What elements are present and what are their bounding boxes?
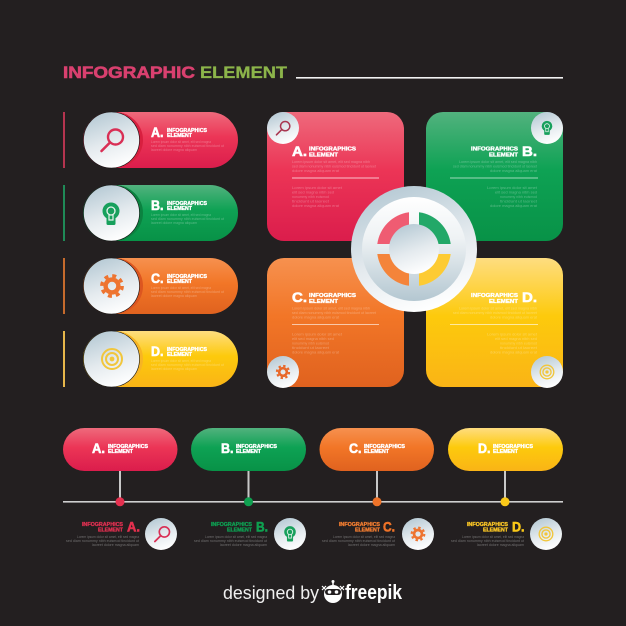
caption D: INFOGRAPHICS [467, 522, 508, 528]
caption D: D. [512, 518, 524, 534]
caption A: Lorem ipsum dolor sit amet, elit sed magna [77, 535, 139, 539]
pill C text: Lorem ipsum dolor sit amet, elit sed magna [151, 286, 211, 290]
panel C text [292, 289, 379, 354]
pill B text [151, 197, 224, 225]
segment: orange [377, 254, 409, 286]
panel A text: nonummy nibh euismod [292, 195, 329, 199]
segment: yellow [419, 254, 451, 286]
segment: red [377, 212, 409, 244]
icon: gear [102, 276, 122, 296]
pill C text [151, 270, 224, 298]
title: INFOGRAPHIC [63, 64, 195, 82]
panel A text: dolore magna aliquam erat [292, 169, 339, 173]
panel B text: Lorem ipsum dolor sit amet, elit sed magna nibh [459, 160, 537, 164]
pill C text: sed diam nonummy nibh euismod tincidunt ut [151, 290, 224, 294]
timeline pill D: INFOGRAPHICS [493, 444, 533, 450]
timeline pill C [320, 428, 434, 471]
caption A: A. [127, 518, 140, 534]
timeline pill D [448, 428, 563, 471]
panel C text: ELEMENT [309, 299, 339, 305]
icon: freepik mascot [322, 580, 344, 603]
timeline pill B: ELEMENT [236, 449, 262, 455]
timeline pill D: ELEMENT [493, 449, 519, 455]
pill B text: sed diam nonummy nibh euismod tincidunt ut [151, 217, 224, 221]
pill B [83, 185, 238, 241]
side bar: green [63, 185, 65, 241]
panel B text: INFOGRAPHICS [471, 146, 518, 152]
caption C: laoreet dolore magna aliquam [348, 543, 395, 547]
panel B text: B. [522, 143, 537, 159]
pill C text: INFOGRAPHICS [167, 274, 207, 280]
timeline pill B [191, 428, 306, 471]
pill C text: laoreet dolore magna aliquam [151, 294, 197, 298]
footer credit: designed by [223, 582, 320, 603]
pill A text: ELEMENT [167, 133, 193, 139]
pill B text: Lorem ipsum dolor sit amet, elit sed magna [151, 213, 211, 217]
pill D text: laoreet dolore magna aliquam [151, 367, 197, 371]
timeline pill A: INFOGRAPHICS [108, 444, 148, 450]
pill C text: ELEMENT [167, 279, 193, 285]
timeline pill C: C. [349, 440, 362, 456]
timeline pill A: ELEMENT [108, 449, 134, 455]
panel B text: tincidunt ut laoreet [500, 200, 537, 204]
panel B text: dolore magna aliquam erat [490, 204, 537, 208]
panel A text: ELEMENT [309, 152, 339, 158]
caption C: sed diam nonummy nibh euismod tincidunt ut [322, 539, 395, 543]
panel D text: ELEMENT [489, 299, 519, 305]
pill C [83, 258, 238, 314]
pill A text: A. [151, 124, 164, 140]
panel A text: elit sed magna nibh sed [292, 190, 334, 194]
panel D text: dolore magna aliquam erat [490, 316, 537, 320]
panel C text: elit sed magna nibh sed [292, 337, 334, 341]
side bar: yellow [63, 331, 65, 387]
caption A: sed diam nonummy nibh euismod tincidunt ut [66, 539, 139, 543]
centre ring chart [351, 186, 477, 312]
timeline pill A: A. [92, 440, 105, 456]
caption D: ELEMENT [483, 528, 509, 534]
pill D text: D. [151, 343, 164, 359]
pill B text: INFOGRAPHICS [167, 201, 207, 207]
icon: bulb badge [274, 518, 306, 550]
caption A: ELEMENT [98, 528, 124, 534]
panel B text: elit sed magna nibh sed [495, 190, 537, 194]
caption A: INFOGRAPHICS [82, 522, 123, 528]
caption D: laoreet dolore magna aliquam [477, 543, 524, 547]
caption B: B. [256, 518, 268, 534]
panel: A [267, 112, 404, 241]
icon: corner magnifier [267, 112, 299, 144]
panel C text: C. [292, 289, 307, 305]
caption B: laoreet dolore magna aliquam [220, 543, 267, 547]
icon: target badge [530, 518, 562, 550]
panel B text: sed diam nonummy nibh euismod tincidunt ut laoreet [453, 164, 537, 168]
icon: corner bulb [531, 112, 563, 144]
caption B: INFOGRAPHICS [211, 522, 252, 528]
pill B text: B. [151, 197, 164, 213]
panel C text: dolore magna aliquam erat [292, 350, 339, 354]
icon: corner target [531, 356, 563, 388]
caption D [451, 518, 562, 550]
icon: magnifier badge [145, 518, 177, 550]
panel B text: nonummy nibh euismod [500, 195, 537, 199]
pill A text: laoreet dolore magna aliquam [151, 148, 197, 152]
panel B text: dolore magna aliquam erat [490, 169, 537, 173]
icon: target [102, 349, 122, 369]
panel C text: dolore magna aliquam erat [292, 316, 339, 320]
panel B text: Lorem ipsum dolor sit amet [487, 186, 537, 190]
panel C text: tincidunt ut laoreet [292, 346, 329, 350]
segment: green [419, 212, 451, 244]
footer credit [223, 580, 403, 604]
panel A text: dolore magna aliquam erat [292, 204, 339, 208]
pill D [83, 331, 238, 387]
caption C: C. [383, 518, 395, 534]
timeline pill C: INFOGRAPHICS [364, 444, 405, 450]
pill A [83, 112, 238, 168]
pill B text: ELEMENT [167, 206, 193, 212]
pill B text: laoreet dolore magna aliquam [151, 221, 197, 225]
icon: light bulb [102, 202, 120, 225]
pill A text: Lorem ipsum dolor sit amet, elit sed magna [151, 140, 211, 144]
caption D: sed diam nonummy nibh euismod tincidunt ut [451, 539, 524, 543]
title [63, 64, 563, 82]
panel C text: Lorem ipsum dolor sit amet [292, 332, 342, 336]
pill A text: INFOGRAPHICS [167, 128, 207, 134]
panel D text: Lorem ipsum dolor sit amet [487, 332, 537, 336]
footer credit: freepik [345, 582, 403, 604]
panel: C [267, 258, 404, 388]
panel C text: sed diam nonummy nibh euismod tincidunt ut laoreet [292, 311, 376, 315]
panel A text: INFOGRAPHICS [309, 146, 356, 152]
caption B: ELEMENT [227, 528, 253, 534]
pill D text [151, 343, 224, 371]
side bar: orange [63, 258, 65, 314]
panel A text: tincidunt ut laoreet [292, 200, 329, 204]
panel D text: INFOGRAPHICS [471, 293, 518, 299]
panel A text: Lorem ipsum dolor sit amet [292, 186, 342, 190]
timeline pill D: D. [478, 440, 490, 456]
timeline pill C: ELEMENT [364, 449, 390, 455]
caption B [194, 518, 306, 550]
pill D text: sed diam nonummy nibh euismod tincidunt ut [151, 363, 224, 367]
icon: gear badge [402, 518, 434, 550]
panel B text: ELEMENT [489, 152, 519, 158]
timeline pill B: B. [221, 440, 234, 456]
side bar: red [63, 112, 65, 168]
ring centre [389, 224, 439, 274]
title: ELEMENT [200, 64, 287, 82]
caption D: Lorem ipsum dolor sit amet, elit sed magna [462, 535, 524, 539]
caption A [66, 518, 177, 550]
panel A text: sed diam nonummy nibh euismod tincidunt ut laoreet [292, 164, 376, 168]
pill D text: ELEMENT [167, 352, 193, 358]
pill D text: Lorem ipsum dolor sit amet, elit sed magna [151, 359, 211, 363]
panel A text: A. [292, 143, 307, 159]
timeline pill A [63, 428, 178, 471]
caption C: INFOGRAPHICS [339, 522, 380, 528]
caption B: Lorem ipsum dolor sit amet, elit sed magna [205, 535, 267, 539]
panel C text: INFOGRAPHICS [309, 293, 356, 299]
panel: B [426, 112, 563, 241]
timeline [63, 471, 563, 506]
caption C: ELEMENT [355, 528, 381, 534]
panel D text: tincidunt ut laoreet [500, 346, 537, 350]
caption C [322, 518, 434, 550]
panel D text: elit sed magna nibh sed [495, 337, 537, 341]
caption A: laoreet dolore magna aliquam [92, 543, 139, 547]
panel D text: sed diam nonummy nibh euismod tincidunt ut laoreet [453, 311, 537, 315]
panel C text: nonummy nibh euismod [292, 342, 329, 346]
panel D text: Lorem ipsum dolor sit amet, elit sed magna nibh [459, 306, 537, 310]
caption C: Lorem ipsum dolor sit amet, elit sed magna [333, 535, 395, 539]
panel B text [450, 143, 538, 208]
panel A text: Lorem ipsum dolor sit amet, elit sed magna nibh [292, 160, 370, 164]
pill A text [151, 124, 224, 152]
panel D text: D. [522, 289, 537, 305]
caption B: sed diam nonummy nibh euismod tincidunt ut [194, 539, 267, 543]
panel C text: Lorem ipsum dolor sit amet, elit sed magna nibh [292, 306, 370, 310]
icon: magnifier [102, 130, 123, 151]
pill C text: C. [151, 270, 164, 286]
timeline pill B: INFOGRAPHICS [236, 444, 277, 450]
icon: corner gear [267, 356, 299, 388]
pill A text: sed diam nonummy nibh euismod tincidunt ut [151, 144, 224, 148]
panel A text [292, 143, 379, 208]
panel D text [450, 289, 538, 354]
panel D text: nonummy nibh euismod [500, 342, 537, 346]
pill D text: INFOGRAPHICS [167, 347, 207, 353]
panel: D [426, 258, 563, 388]
panel D text: dolore magna aliquam erat [490, 350, 537, 354]
